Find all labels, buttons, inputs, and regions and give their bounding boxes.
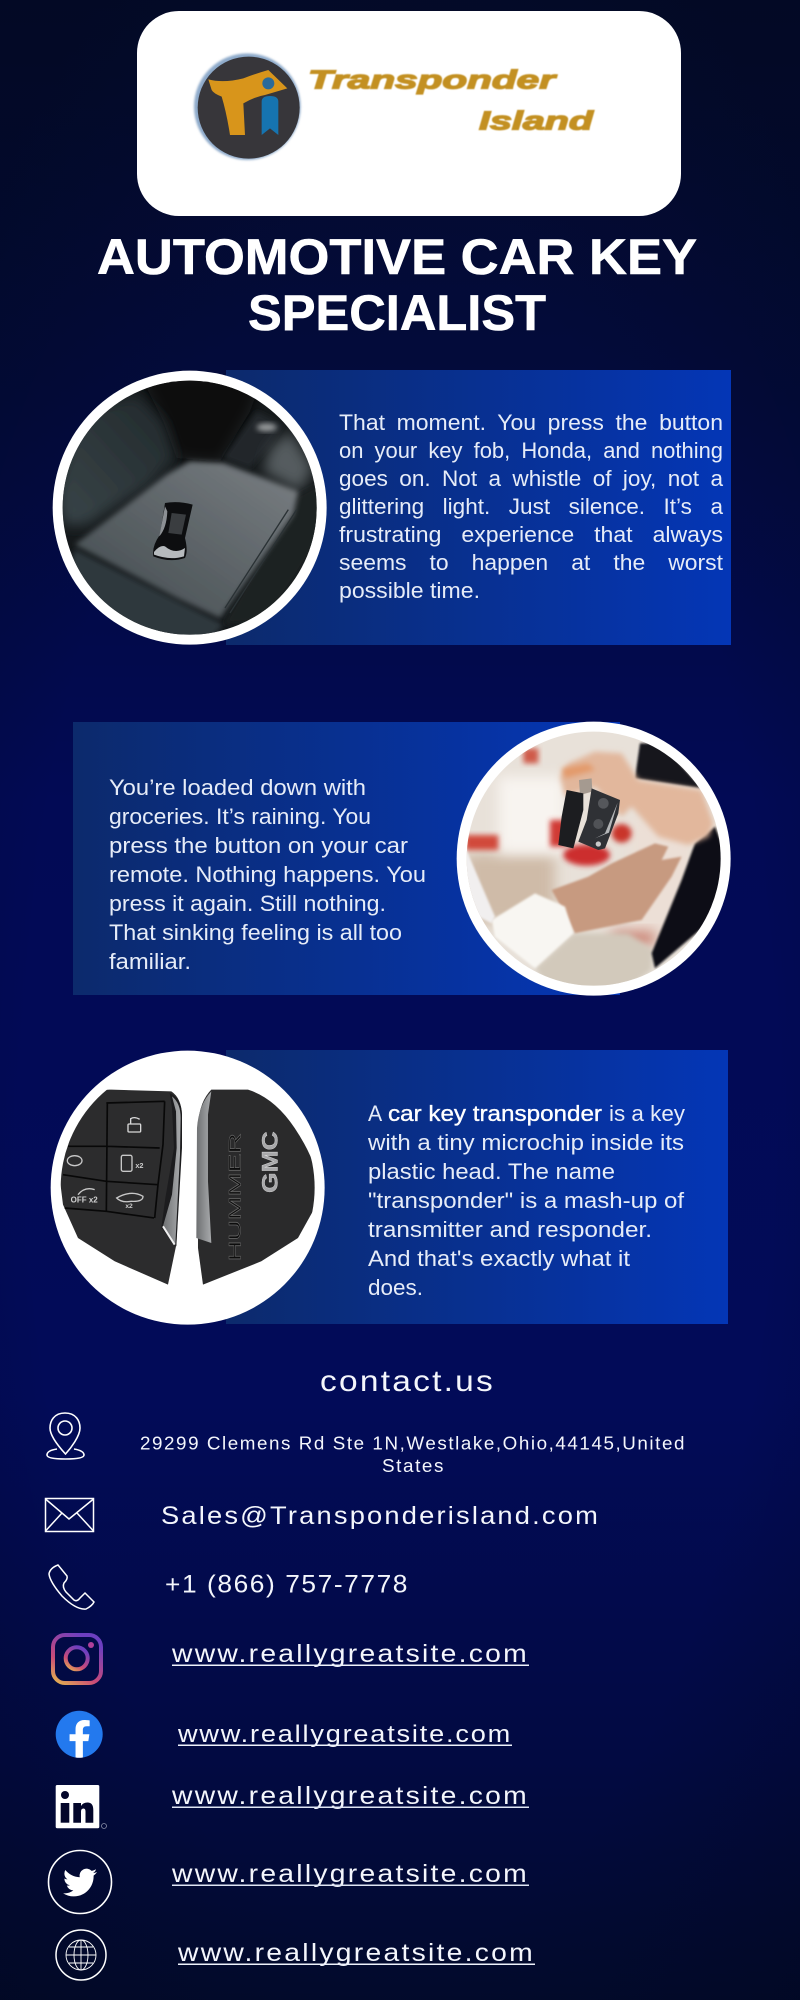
- contact heading: contact.us: [320, 1365, 495, 1398]
- left fob shell: OFF x2: [71, 1196, 98, 1205]
- twitter link: www.reallygreatsite.com: [171, 1860, 529, 1888]
- email row: [46, 1498, 600, 1532]
- panel text: And that's exactly what it: [368, 1246, 630, 1271]
- photo: handing over car keys: [457, 722, 731, 996]
- panel text: familiar.: [109, 949, 191, 974]
- panel: car key transponder: [51, 1050, 728, 1325]
- panel text: glittering light. Just silence. It’s a: [339, 494, 724, 519]
- facebook row: [56, 1711, 512, 1758]
- icon: envelope: [46, 1498, 94, 1532]
- logo wordmark: [308, 64, 595, 136]
- panel text: is a key: [609, 1101, 685, 1126]
- twitter row: [48, 1850, 529, 1914]
- panel text: You’re loaded down with: [109, 775, 366, 800]
- panel text: "transponder" is a mash-up of: [368, 1188, 685, 1213]
- contact section: [46, 1365, 686, 1980]
- left fob shell: [58, 1090, 182, 1285]
- panel text: transmitter and responder.: [368, 1217, 652, 1242]
- icon: phone handset: [49, 1565, 94, 1609]
- title: [97, 229, 697, 341]
- icon: twitter: [48, 1850, 112, 1914]
- panel background: [73, 722, 620, 995]
- website row: [56, 1930, 535, 1980]
- right fob shell: [196, 1090, 318, 1285]
- address text: [140, 1434, 686, 1476]
- panel text: [339, 410, 724, 603]
- panel text: press it again. Still nothing.: [109, 891, 386, 916]
- icon: instagram: [53, 1635, 101, 1683]
- panel text: seems to happen at the worst: [339, 550, 723, 575]
- right fob shell: GMC: [257, 1131, 282, 1193]
- icon: car keys: [558, 778, 620, 850]
- email text: Sales@Transponderisland.com: [161, 1502, 600, 1530]
- address text: States: [382, 1456, 445, 1476]
- address row: [47, 1413, 686, 1476]
- panel text: does.: [368, 1275, 423, 1300]
- icon: facebook: [56, 1711, 103, 1758]
- title: SPECIALIST: [248, 285, 546, 341]
- panel text: goes on. Not a whistle of joy, not a: [339, 466, 724, 491]
- icon: linkedin: [56, 1785, 106, 1828]
- website link: www.reallygreatsite.com: [177, 1939, 535, 1967]
- facebook link: www.reallygreatsite.com: [177, 1721, 512, 1748]
- panel background: [226, 1050, 728, 1324]
- panel text: plastic head. The name: [368, 1159, 615, 1184]
- panel text: with a tiny microchip inside its: [367, 1130, 684, 1155]
- panel text: [367, 1101, 685, 1300]
- left fob shell: x2: [135, 1161, 143, 1170]
- panel text: That sinking feeling is all too: [109, 920, 402, 945]
- panel background: [226, 370, 731, 645]
- left fob shell: x2: [125, 1203, 133, 1210]
- icon: globe: [56, 1930, 106, 1980]
- panel text: press the button on your car: [109, 833, 408, 858]
- linkedin link: www.reallygreatsite.com: [171, 1782, 529, 1810]
- icon: location pin: [47, 1413, 84, 1459]
- right fob shell: HUMMER: [226, 1133, 245, 1261]
- icon: key fob: [153, 502, 193, 560]
- photo: key fob shells: [51, 1051, 325, 1325]
- panel text: A: [368, 1101, 382, 1126]
- panel text: frustrating experience that always: [339, 522, 723, 547]
- panel text: on your key fob, Honda, and nothing: [339, 438, 723, 463]
- panel text: groceries. It’s raining. You: [109, 804, 371, 829]
- instagram row: [53, 1635, 529, 1683]
- linkedin row: [56, 1782, 529, 1828]
- photo: key fob on armrest: [53, 371, 327, 645]
- panel: key fob silence: [53, 370, 731, 645]
- panel text: [109, 775, 426, 974]
- logo wordmark: Island: [479, 106, 595, 136]
- logo card: [137, 11, 681, 216]
- panel text: That moment. You press the button: [339, 410, 723, 435]
- panel text: possible time.: [339, 578, 480, 603]
- logo wordmark: Transponder: [308, 64, 558, 94]
- panel text: car key transponder: [388, 1101, 602, 1126]
- phone row: [49, 1565, 409, 1609]
- title: AUTOMOTIVE CAR KEY: [97, 229, 697, 285]
- panel text: remote. Nothing happens. You: [109, 862, 426, 887]
- icon: Ti logo badge: [194, 53, 301, 160]
- panel: groceries in the rain: [73, 722, 731, 996]
- address text: 29299 Clemens Rd Ste 1N,Westlake,Ohio,44145,United: [140, 1434, 686, 1454]
- phone text: +1 (866) 757-7778: [165, 1570, 409, 1598]
- instagram link: www.reallygreatsite.com: [171, 1640, 529, 1668]
